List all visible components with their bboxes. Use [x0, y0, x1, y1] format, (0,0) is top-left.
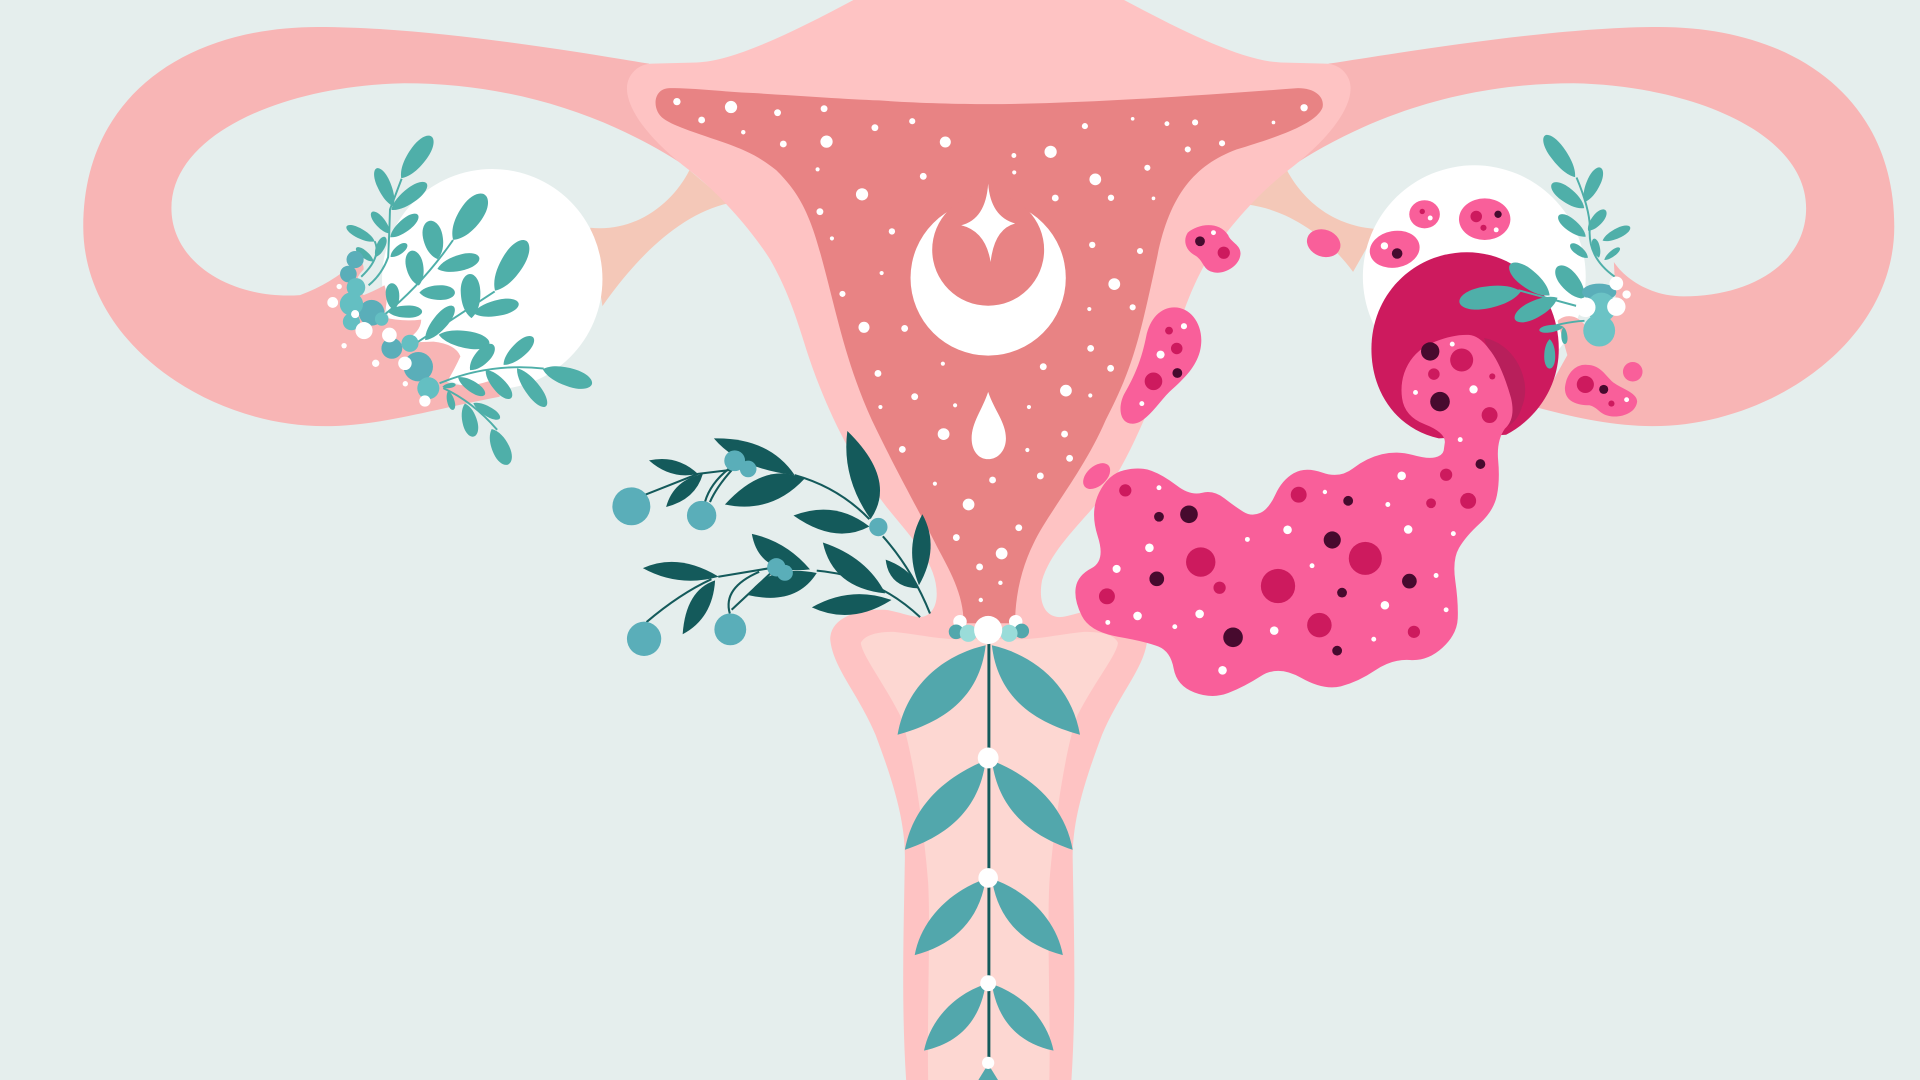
ovary cyst: top: [1409, 200, 1440, 228]
lesion: oval on ligament: [1303, 225, 1344, 262]
fallopian tube: right: [1286, 27, 1894, 426]
ovary cyst: right: [1459, 198, 1510, 240]
lesion: small oval near wall: [1078, 458, 1115, 494]
ovary: right white: [1363, 165, 1586, 388]
icon: crescent moon and star: [911, 184, 1066, 356]
dark sprig: left of cervix: [612, 431, 931, 656]
endometriosis: large spreading lesion: [1075, 335, 1513, 696]
ovary cyst: left: [1367, 227, 1423, 272]
vagina inner canal: [861, 632, 1118, 1080]
endometriosis: inflamed right ovary: [1371, 252, 1559, 438]
ligament: right: [1248, 170, 1378, 272]
fallopian tube: left: [83, 27, 692, 426]
lesion: small blob on uterus wall: [1185, 225, 1241, 273]
teal sprig: right ovary: [1458, 131, 1632, 369]
teal sprig: left ovary: [327, 131, 595, 468]
ligament: left: [590, 170, 729, 306]
uterine cavity with dots: [656, 88, 1323, 623]
icon: drop: [972, 392, 1006, 459]
cervix flower cluster: [949, 615, 1029, 644]
lesion: small dot on right tube: [1623, 362, 1643, 382]
lesion: on right tube: [1565, 365, 1637, 417]
lesion: teardrop on uterus wall: [1120, 307, 1201, 424]
uterus body and cervix outer wall: [627, 0, 1351, 1080]
central stem with leaves: [898, 637, 1080, 1080]
ovary: left white: [382, 169, 602, 389]
